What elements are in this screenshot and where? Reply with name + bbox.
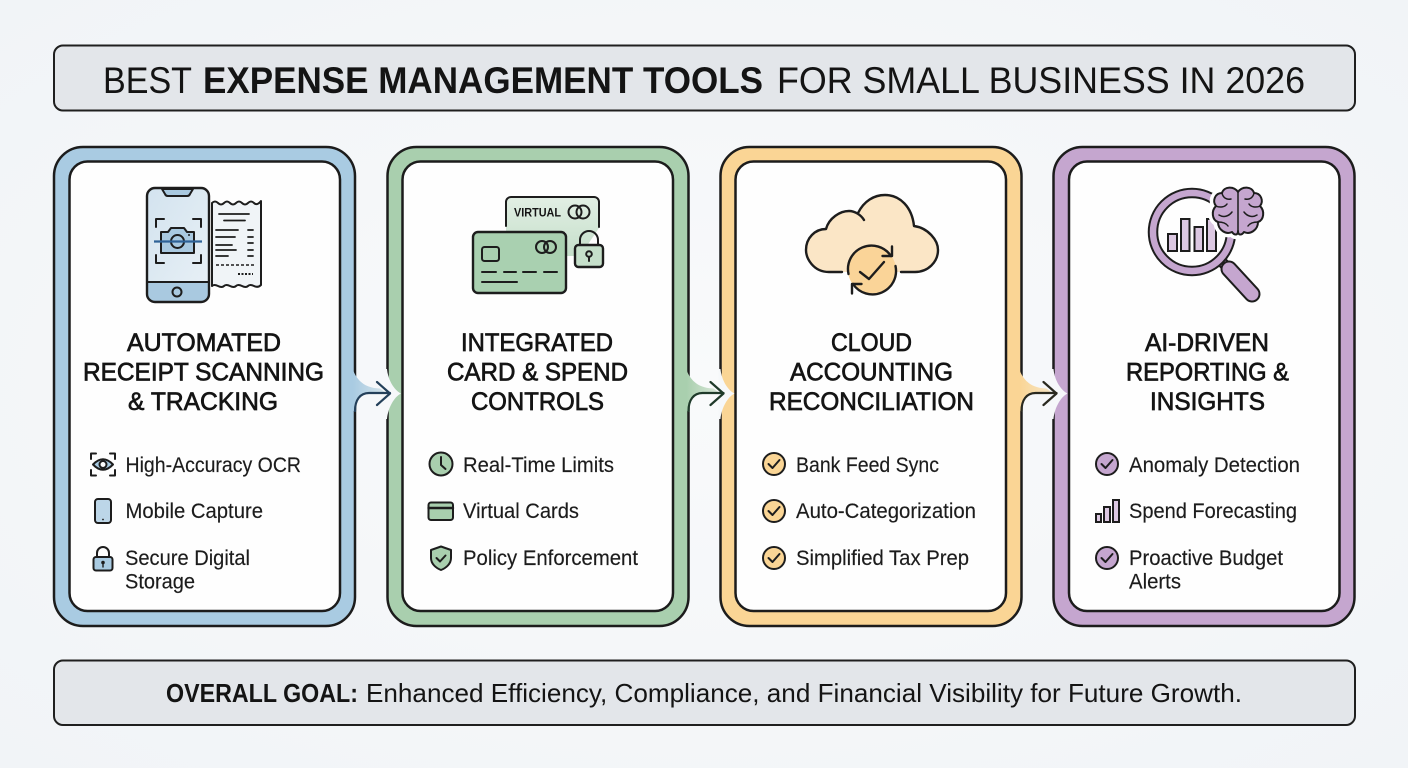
title: EXPENSE MANAGEMENT TOOLS <box>203 60 763 101</box>
icon: cloud with sync check <box>806 195 938 294</box>
feature: proactive budget alerts: Proactive Budget <box>1129 547 1283 570</box>
feature: spend forecasting: Spend Forecasting <box>1129 500 1297 523</box>
icon: credit cards and lock <box>473 197 603 293</box>
arrow: cloud accounting to AI reporting <box>1020 369 1068 419</box>
heading: CARD & SPEND <box>447 358 628 386</box>
arrow: receipt scanning to card controls <box>353 369 401 419</box>
heading: AI-DRIVEN <box>1145 329 1269 357</box>
panel: automated receipt scanning <box>54 147 355 626</box>
feature: policy enforcement: Policy Enforcement <box>463 547 638 570</box>
heading: REPORTING & <box>1126 358 1289 386</box>
heading: CONTROLS <box>471 388 604 416</box>
heading <box>83 329 324 416</box>
feature: secure digital storage <box>94 547 250 594</box>
heading: AUTOMATED <box>127 329 281 357</box>
feature: simplified tax prep: Simplified Tax Prep <box>796 547 969 570</box>
arrow: card controls to cloud accounting <box>686 369 734 419</box>
heading: & TRACKING <box>128 388 278 416</box>
feature: high-accuracy OCR: High-Accuracy OCR <box>126 454 301 477</box>
heading <box>769 329 974 416</box>
icon: credit cards and lock: VIRTUAL <box>514 206 561 220</box>
heading: RECONCILIATION <box>769 388 974 416</box>
feature: virtual cards: Virtual Cards <box>463 500 579 523</box>
heading: INSIGHTS <box>1150 388 1265 416</box>
panel: cloud accounting reconciliation <box>720 147 1022 626</box>
heading: INTEGRATED <box>461 329 613 357</box>
heading: RECEIPT SCANNING <box>83 358 324 386</box>
title <box>54 46 1355 110</box>
panel: integrated card and spend controls <box>388 147 688 626</box>
feature: bank feed sync: Bank Feed Sync <box>796 454 939 477</box>
feature: proactive budget alerts: Alerts <box>1129 570 1181 594</box>
panel: AI-driven reporting and insights <box>1054 147 1354 626</box>
feature: secure digital storage: Secure Digital <box>125 547 250 570</box>
feature: auto-categorization: Auto-Categorization <box>796 500 976 523</box>
overall goal banner: OVERALL GOAL: <box>166 678 358 708</box>
feature: secure digital storage: Storage <box>125 570 195 594</box>
feature: anomaly detection: Anomaly Detection <box>1129 454 1300 477</box>
title: BEST <box>103 60 192 101</box>
feature: proactive budget alerts <box>1096 547 1283 594</box>
overall goal banner <box>54 660 1355 725</box>
heading: ACCOUNTING <box>790 358 953 386</box>
feature: real-time limits: Real-Time Limits <box>463 454 614 477</box>
heading <box>1126 329 1289 416</box>
heading <box>447 329 628 416</box>
feature: mobile capture: Mobile Capture <box>126 500 263 523</box>
heading: CLOUD <box>831 329 912 357</box>
icon: phone scanning a receipt <box>147 188 261 302</box>
overall goal banner: Enhanced Efficiency, Compliance, and Financial Visibility for Future Growth. <box>366 678 1242 708</box>
icon: magnifier, bars and brain <box>1153 188 1263 294</box>
title: FOR SMALL BUSINESS IN 2026 <box>777 60 1305 101</box>
